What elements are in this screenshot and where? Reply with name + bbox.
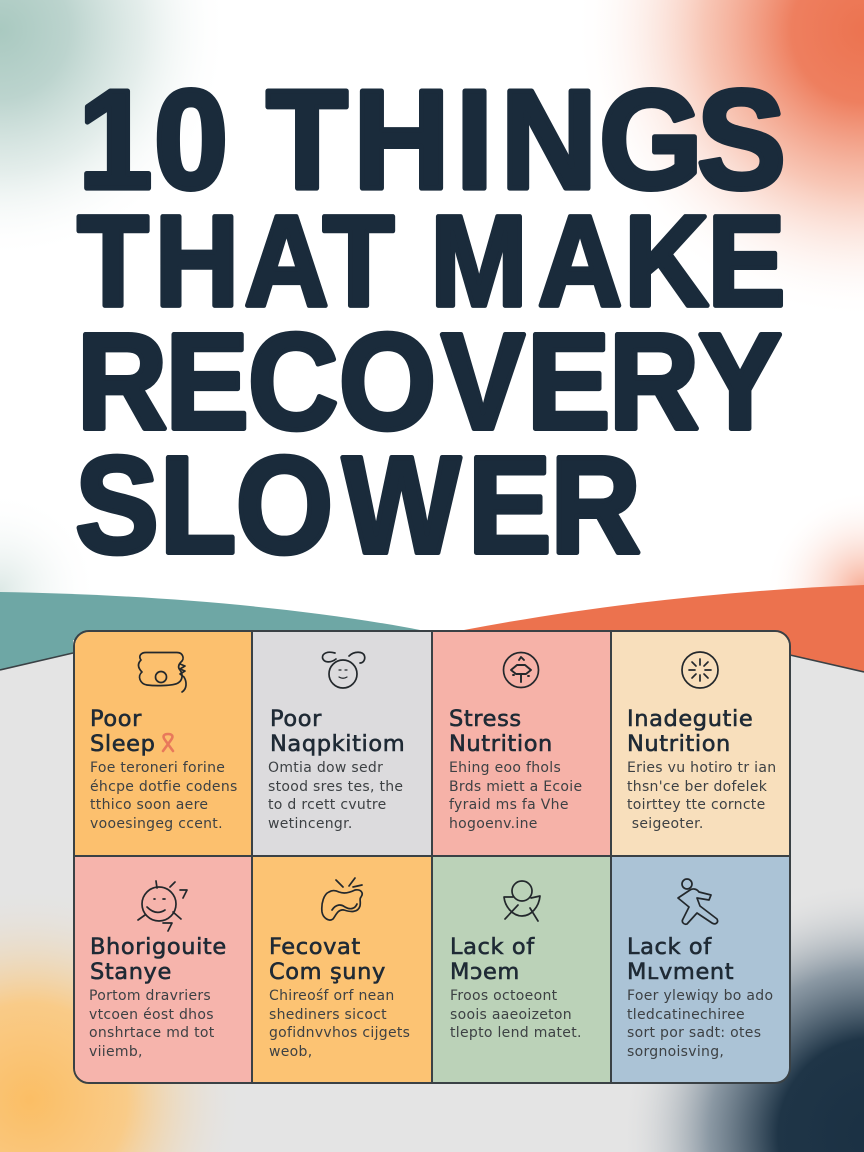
card: Lack of Movement [612, 857, 792, 1084]
text: seigeoter. [632, 816, 704, 832]
card: Poor Sleep [75, 632, 255, 859]
heading [269, 934, 386, 985]
heading [270, 706, 405, 757]
text: vtcoen éost dhos [89, 1007, 214, 1023]
heading: Bhorigouite [90, 934, 227, 960]
text [449, 760, 582, 832]
card: Inadegutie Nutrition [612, 632, 792, 859]
text: sort por sadt: otes [627, 1025, 761, 1041]
text: Eries vu hotiro tr ian [627, 760, 776, 776]
text: soois aaeoizeton [450, 1007, 572, 1023]
heading [450, 934, 535, 985]
text: wetincengr. [268, 816, 353, 832]
heading [627, 706, 753, 757]
heading: Inadegutie [627, 706, 753, 732]
text: viiemb, [89, 1044, 143, 1060]
card: Stress Nutrition [433, 632, 613, 859]
heading: Lack of [627, 934, 712, 960]
wave: orange [464, 585, 864, 700]
text [90, 760, 238, 832]
icon: circle stress [502, 652, 540, 688]
title: 10 THINGS [78, 62, 786, 219]
text: tthico soon aere [90, 797, 208, 813]
text: stood sres tes, the [268, 779, 403, 795]
text: gofidnvvhos cijgets [269, 1025, 410, 1041]
card: Fecovat Com suny [253, 857, 433, 1084]
card: Poor Nagpkitiom [253, 632, 433, 859]
text [89, 988, 215, 1060]
text: Brds miett a Ecoie [449, 779, 582, 795]
text: weob, [269, 1044, 312, 1060]
text: Chireośf orf nean [269, 988, 395, 1004]
lower grey area [0, 640, 864, 1152]
wave: teal [0, 592, 420, 700]
text: hogoenv.ine [449, 816, 538, 832]
card: Bhorigouite Stanye [75, 857, 255, 1084]
icon: person in leaves [503, 880, 541, 922]
text [627, 760, 776, 832]
text: Omtia dow sedr [268, 760, 383, 776]
heading [90, 706, 156, 757]
glow: navy bottom right [647, 907, 864, 1152]
text: Ehing eoo fhols [449, 760, 561, 776]
card: Lack of Mbem [433, 857, 613, 1084]
heading: Sleep [90, 731, 156, 757]
icon: burst blob [320, 877, 364, 921]
text [269, 988, 410, 1060]
heading: Fecovat [269, 934, 361, 960]
text: to d rcett cvutre [268, 797, 387, 813]
text: Foer ylewiqy bo ado [627, 988, 773, 1004]
heading: Nutrition [449, 731, 553, 757]
panel: factor grid [73, 630, 791, 1084]
text: Portom dravriers [89, 988, 211, 1004]
text: toirttey tte corncte [627, 797, 766, 813]
icon: face with ears [322, 651, 366, 689]
title: THAT MAKE [77, 189, 785, 334]
text: tledcatinechiree [627, 1007, 745, 1023]
heading: Stress [449, 706, 522, 732]
heading [627, 934, 734, 985]
text: vooesingeg ccent. [90, 816, 223, 832]
text [450, 988, 582, 1041]
text: Foe teroneri forine [90, 760, 225, 776]
heading: Mʟvment [627, 959, 734, 985]
text: onshrtace md tot [89, 1025, 215, 1041]
heading [90, 934, 227, 985]
icon: pillow [138, 652, 187, 693]
title: SLOWER [75, 428, 641, 582]
icon: sun face [137, 880, 188, 932]
wash: orange top right [560, 0, 864, 330]
text: thsn'ce ber dofelek [627, 779, 767, 795]
wash: teal top left [0, 0, 240, 270]
text: éhcpe dotfie codens [90, 779, 238, 795]
heading: Poor [90, 706, 142, 732]
title: RECOVERY [77, 304, 782, 458]
text: tlepto lend matet. [450, 1025, 582, 1041]
text: fyraid ms fa Vhe [449, 797, 569, 813]
heading: Naqpkitiom [270, 731, 405, 757]
text [627, 988, 773, 1060]
heading: Poor [270, 706, 322, 732]
heading: Lack of [450, 934, 535, 960]
icon: circle burst [681, 651, 719, 689]
heading: Nutrition [627, 731, 731, 757]
text: sorgnoisving, [627, 1044, 724, 1060]
text [268, 760, 403, 832]
icon: walking person [677, 878, 718, 926]
text: Froos octoeont [450, 988, 557, 1004]
heading: Com şuny [269, 959, 386, 985]
heading [449, 706, 553, 757]
title [75, 62, 786, 582]
heading: Stanye [90, 959, 172, 985]
icon: ribbon [162, 732, 174, 752]
glow: orange bottom left [0, 920, 210, 1152]
heading: Mɔem [450, 959, 520, 985]
text: shediners sicoct [269, 1007, 387, 1023]
